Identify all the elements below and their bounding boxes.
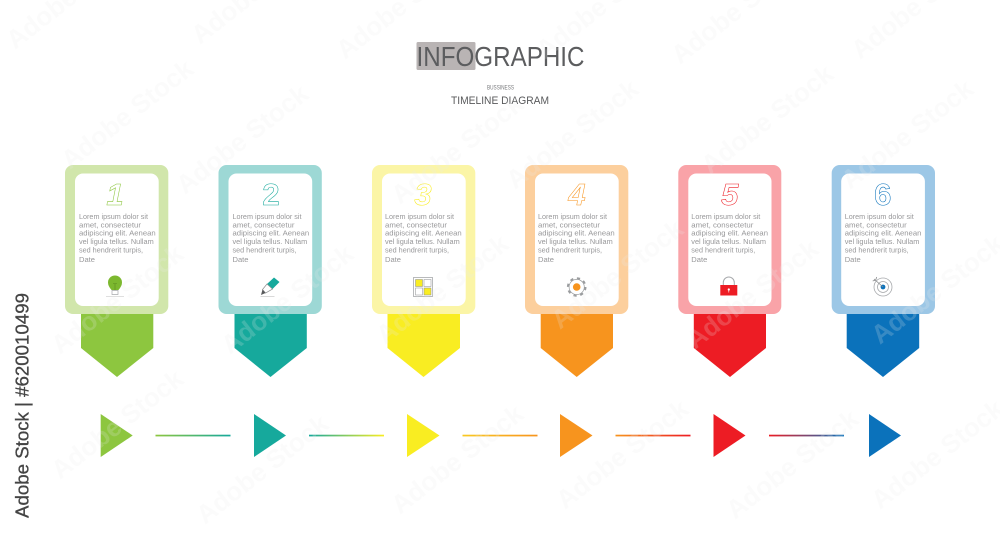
- description 5: Lorem ipsum dolor sit: [691, 212, 761, 221]
- panel: step 5: [678, 165, 781, 377]
- icon: pen: [260, 278, 280, 296]
- watermark pattern: Adobe Stock: [835, 73, 979, 195]
- watermark pattern: Adobe Stock: [680, 233, 824, 355]
- panel: step 1: [65, 165, 168, 377]
- description 5: amet, consectetur: [691, 220, 754, 229]
- description 1: adipiscing elit. Aenean: [79, 229, 156, 238]
- description 5: sed hendrerit turpis,: [691, 245, 755, 254]
- timeline: connector 3: [462, 435, 538, 436]
- description 1: sed hendrerit turpis,: [79, 245, 143, 254]
- icon: padlock: [720, 277, 737, 296]
- description 3: vel ligula tellus. Nullam: [385, 237, 460, 246]
- description 6: sed hendrerit turpis,: [845, 245, 909, 254]
- watermark pattern: Adobe Stock: [45, 238, 189, 360]
- description 2: Date: [232, 255, 248, 264]
- description 6: adipiscing elit. Aenean: [845, 229, 921, 238]
- description 5: Date: [691, 255, 707, 264]
- subtitle: timeline diagram: TIMELINE DIAGRAM: [451, 95, 549, 107]
- description 2: vel ligula tellus. Nullam: [232, 237, 307, 246]
- watermark pattern: Adobe Stock: [550, 393, 694, 515]
- timeline: triangle 2: [254, 414, 286, 457]
- watermark pattern: Adobe Stock: [55, 53, 199, 175]
- description 6: [845, 212, 921, 264]
- panel: step 2: [218, 165, 322, 377]
- credit: adobe stock id: Adobe Stock | #620010499: [12, 293, 32, 518]
- arrow tab 3: [388, 314, 460, 377]
- description 1: Date: [79, 255, 95, 264]
- description 4: adipiscing elit. Aenean: [538, 229, 615, 238]
- description 4: Date: [538, 255, 554, 264]
- arrow tab 2: [234, 314, 307, 377]
- number 1: 1: [106, 177, 124, 212]
- timeline: triangle 3: [407, 414, 440, 457]
- panel: step 6: [832, 165, 935, 377]
- panel: step 3: [372, 165, 475, 377]
- description 4: sed hendrerit turpis,: [538, 245, 602, 254]
- timeline: triangle 6: [869, 414, 901, 457]
- watermark pattern: Adobe Stock: [500, 73, 644, 195]
- description 3: Date: [385, 255, 401, 264]
- icon: target: [873, 277, 892, 296]
- watermark pattern: Adobe Stock: [720, 403, 864, 525]
- description 1: Lorem ipsum dolor sit: [79, 212, 149, 221]
- description 4: [538, 212, 615, 264]
- description 3: [385, 212, 462, 264]
- description 5: vel ligula tellus. Nullam: [691, 237, 766, 246]
- number 6: 6: [874, 177, 891, 212]
- description 3: amet, consectetur: [385, 220, 447, 229]
- description 2: [232, 212, 309, 264]
- timeline: triangle 5: [714, 414, 746, 457]
- number 2: 2: [262, 177, 280, 212]
- watermark pattern: Adobe Stock: [190, 408, 334, 530]
- description 3: sed hendrerit turpis,: [385, 245, 449, 254]
- description 1: [79, 212, 156, 264]
- description 2: sed hendrerit turpis,: [232, 245, 296, 254]
- description 4: vel ligula tellus. Nullam: [538, 237, 613, 246]
- timeline: connector 1: [156, 435, 230, 436]
- watermark pattern: Adobe Stock: [695, 58, 839, 180]
- timeline: triangle 4: [560, 414, 592, 457]
- watermark pattern: Adobe Stock: [385, 88, 529, 210]
- description 6: Date: [845, 255, 861, 264]
- icon: calculator: [414, 278, 432, 296]
- timeline: triangle 1: [101, 414, 133, 457]
- title: INFOGRAPHIC: [416, 41, 584, 72]
- number 4: 4: [567, 177, 586, 212]
- arrow tab 6: [847, 314, 919, 377]
- description 2: amet, consectetur: [232, 220, 295, 229]
- description 6: amet, consectetur: [845, 220, 907, 229]
- watermark pattern: Adobe Stock: [215, 238, 359, 360]
- arrow tab 5: [694, 314, 766, 377]
- subtitle: bussiness: BUSSINESS: [487, 86, 514, 92]
- number 5: 5: [721, 177, 739, 212]
- description 3: adipiscing elit. Aenean: [385, 229, 462, 238]
- panel: step 4: [525, 165, 628, 377]
- watermark pattern: Adobe Stock: [170, 78, 314, 200]
- description 5: [691, 212, 768, 264]
- description 5: adipiscing elit. Aenean: [691, 229, 768, 238]
- watermark pattern: Adobe Stock: [545, 213, 689, 335]
- description 6: vel ligula tellus. Nullam: [845, 237, 919, 246]
- icon: light bulb: [106, 276, 124, 296]
- arrow tab 4: [541, 314, 613, 377]
- timeline: connector 4: [616, 435, 690, 436]
- timeline: connector 2: [309, 435, 384, 436]
- number 3: 3: [414, 177, 432, 212]
- description 6: Lorem ipsum dolor sit: [845, 212, 915, 221]
- description 1: amet, consectetur: [79, 220, 141, 229]
- description 2: Lorem ipsum dolor sit: [232, 212, 302, 221]
- description 1: vel ligula tellus. Nullam: [79, 237, 154, 246]
- watermark pattern: Adobe Stock: [370, 228, 514, 350]
- icon: gear: [568, 278, 586, 296]
- watermark pattern: Adobe Stock: [385, 398, 529, 520]
- arrow tab 1: [81, 314, 153, 377]
- description 4: amet, consectetur: [538, 220, 600, 229]
- watermark pattern: Adobe Stock: [45, 363, 189, 485]
- timeline: connector 5: [769, 435, 844, 436]
- description 2: adipiscing elit. Aenean: [232, 229, 309, 238]
- description 3: Lorem ipsum dolor sit: [385, 212, 455, 221]
- description 4: Lorem ipsum dolor sit: [538, 212, 608, 221]
